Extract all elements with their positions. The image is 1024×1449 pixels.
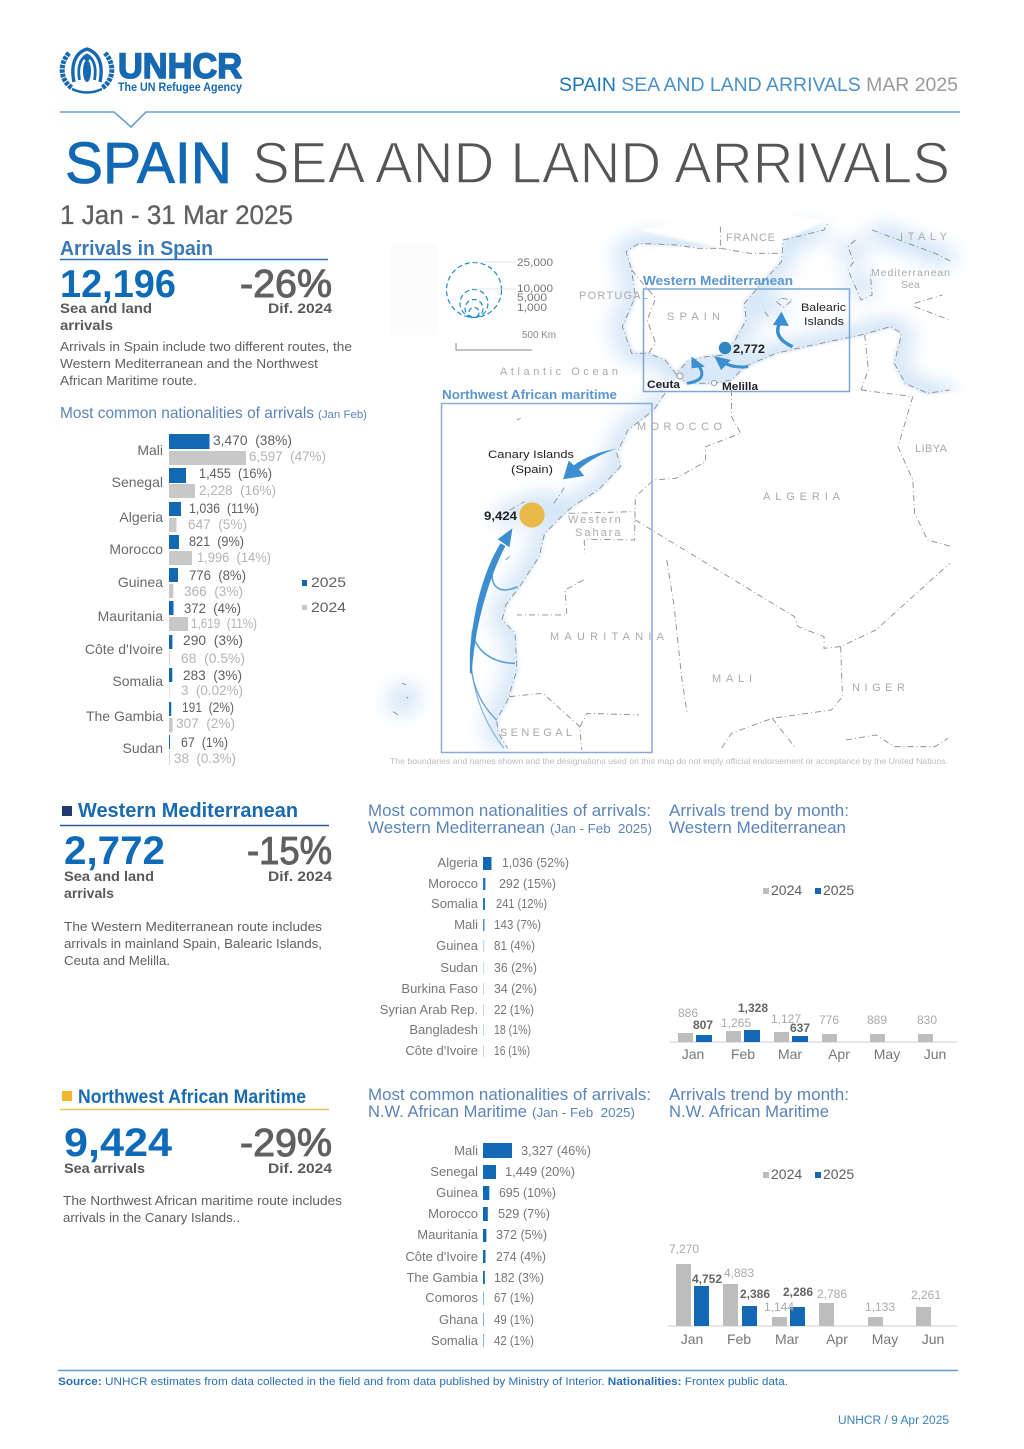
bar chart: nationalities of arrivals: The Gambia <box>86 708 163 724</box>
bar chart: Western Mediterranean nationalities: Algeria <box>438 855 479 870</box>
panel: arrivals in Spain: Dif. 2024 <box>268 300 332 316</box>
description <box>60 339 352 388</box>
column chart: Northwest African by month: 4,752 <box>692 1272 722 1286</box>
map labels: countries and seas: FRANCE <box>726 232 778 244</box>
scale bar: 500 Km <box>522 330 556 341</box>
bar chart: nationalities of arrivals: Mauritania <box>98 608 163 624</box>
map labels: countries and seas: NIGER <box>852 682 908 694</box>
column chart: Northwest African by month: 1,144 <box>764 1300 794 1314</box>
bar chart: nationalities of arrivals: 1,036 (11%) <box>189 500 259 516</box>
column chart: Western Mediterranean by month: 776 <box>819 1013 839 1027</box>
column chart: Northwest African by month: 2,786 <box>817 1287 847 1301</box>
proportional symbol: Western Mediterranean: 2,772 <box>733 344 765 356</box>
bar chart: Western Mediterranean nationalities: 16 (1%) <box>494 1043 530 1058</box>
bar chart: Western Mediterranean nationalities: 292 (15%) <box>499 876 556 891</box>
icon: UNHCR emblem <box>62 49 112 92</box>
map labels: places: Balearic <box>801 302 847 314</box>
bar chart: Western Mediterranean nationalities: 81 (4%) <box>494 938 535 953</box>
bar chart: nationalities of arrivals: Algeria <box>119 509 163 525</box>
column chart: Northwest African by month: Jan <box>681 1331 703 1347</box>
description <box>64 919 323 968</box>
heading: Western Mediterranean trend: Arrivals trend by month: <box>669 802 849 820</box>
bar chart: Western Mediterranean nationalities: Morocco <box>428 876 478 891</box>
heading: Western Mediterranean nationalities: (Jan - Feb 2025) <box>550 822 652 836</box>
map labels: places: (Spain) <box>511 464 553 476</box>
column chart: Northwest African by month: 2,286 <box>783 1285 813 1299</box>
map glow and land <box>395 210 965 753</box>
heading: Northwest African nationalities: N.W. African Maritime <box>368 1103 527 1121</box>
bar chart: Western Mediterranean nationalities: 22 (1%) <box>494 1002 534 1017</box>
chart legend: 2024 <box>311 599 346 615</box>
African land <box>498 328 965 753</box>
bar chart: Northwest African nationalities: Comoros <box>425 1290 478 1305</box>
bar chart: Northwest African nationalities: 182 (3%) <box>494 1270 544 1285</box>
bar chart: Northwest African nationalities: 49 (1%) <box>494 1312 534 1327</box>
bar chart: Northwest African nationalities: 529 (7%) <box>498 1206 550 1221</box>
bar chart: Northwest African nationalities: 67 (1%) <box>494 1290 534 1305</box>
chart legend <box>302 574 346 615</box>
route box: Northwest African maritime: Northwest African maritime <box>442 388 617 402</box>
heading: Northwest African trend: Arrivals trend by month: <box>669 1086 849 1104</box>
country borders and coastlines <box>393 223 952 750</box>
bar chart: nationalities of arrivals: 372 (4%) <box>184 600 241 616</box>
route box: Western Mediterranean <box>643 274 850 392</box>
legend: 2025 <box>823 1166 854 1182</box>
heading: Northwest African nationalities: (Jan - Feb 2025) <box>532 1106 635 1120</box>
map labels: places: Melilla <box>722 381 759 393</box>
description: The Northwest African maritime route includes <box>63 1193 343 1208</box>
map labels: countries and seas: ALGERIA <box>763 491 843 503</box>
heading: Northwest African nationalities: Most common nationalities of arrivals: <box>368 1086 651 1104</box>
column chart: Western Mediterranean by month: Mar <box>778 1046 802 1062</box>
map labels: countries and seas: MOROCCO <box>637 421 725 433</box>
bar chart: nationalities of arrivals: Côte d'Ivoire <box>85 641 163 657</box>
bar chart: Western Mediterranean nationalities: 241 (12%) <box>496 896 547 911</box>
source note: Source: UNHCR estimates from data collected in the field and from data published by Ministry of Interior. Nationalities: Frontex public data. <box>58 1376 788 1388</box>
bar chart: nationalities of arrivals: 821 (9%) <box>189 533 244 549</box>
bar chart: Northwest African nationalities: Mali <box>454 1143 478 1158</box>
bar chart: nationalities of arrivals: Morocco <box>109 541 163 557</box>
column chart: Northwest African by month: 2,261 <box>911 1288 941 1302</box>
logo tagline: The UN Refugee Agency <box>118 82 243 94</box>
title: SPAIN <box>65 131 232 196</box>
heading: nationalities chart: Most common nationalities of arrivals <box>60 405 314 422</box>
arrows: Northwest African maritime routes <box>470 528 518 748</box>
map labels: places: Canary Islands <box>488 449 575 461</box>
map <box>390 210 965 753</box>
column chart: Northwest African by month: 1,133 <box>865 1300 895 1314</box>
panel: Northwest African Maritime <box>60 1087 343 1225</box>
column chart: Northwest African by month: 4,883 <box>724 1266 754 1280</box>
map disclaimer: The boundaries and names shown and the designations used on this map do not imply official endorsement or acceptance by the United Nations. <box>390 756 948 766</box>
bar chart: Northwest African nationalities: Somalia <box>431 1333 479 1348</box>
column chart: Northwest African by month: 2,386 <box>740 1287 770 1301</box>
column chart: Western Mediterranean by month: 807 <box>693 1018 713 1032</box>
bar chart: Western Mediterranean nationalities <box>380 855 569 1058</box>
bar chart: Northwest African nationalities: Côte d'Ivoire <box>405 1249 478 1264</box>
bar chart: Northwest African nationalities: The Gambia <box>406 1270 479 1285</box>
heading: Northwest African nationalities <box>368 1086 651 1121</box>
bar chart: nationalities of arrivals: 3 (0.02%) <box>181 682 243 698</box>
marker square <box>62 806 72 816</box>
description <box>63 1193 343 1225</box>
heading: Western Mediterranean nationalities: Western Mediterranean <box>368 819 545 837</box>
column chart: Northwest African by month: Jun <box>922 1331 944 1347</box>
map labels: countries and seas <box>500 231 950 739</box>
bar chart: Northwest African nationalities: Senegal <box>430 1164 478 1179</box>
panel: Western Mediterranean <box>60 800 332 968</box>
legend: proportional circles: 25,000 <box>517 257 553 269</box>
heading: Northwest African trend: N.W. African Maritime <box>669 1103 829 1121</box>
chart legend: 2025 <box>311 574 346 590</box>
bars 2024 <box>169 451 246 765</box>
map labels: countries and seas: LIBYA <box>915 443 950 455</box>
date range: 1 Jan - 31 Mar 2025 <box>60 200 293 230</box>
map labels: countries and seas: MAURITANIA <box>550 631 667 643</box>
bar chart: nationalities of arrivals: 68 (0.5%) <box>181 650 245 666</box>
map labels: countries and seas: Western <box>568 514 623 526</box>
bar chart: Western Mediterranean nationalities: Syrian Arab Rep. <box>380 1002 478 1017</box>
bar chart: Western Mediterranean nationalities: Sudan <box>440 960 478 975</box>
column chart: Western Mediterranean by month: 1,127 <box>771 1012 801 1026</box>
column chart: Western Mediterranean by month: Jun <box>924 1046 946 1062</box>
bar chart: Northwest African nationalities: Morocco <box>428 1206 478 1221</box>
column chart: Western Mediterranean by month: 886 <box>678 1006 698 1020</box>
total arrivals: 2,772 <box>64 829 165 873</box>
change vs 2024: -15% <box>247 830 332 873</box>
column chart: Western Mediterranean by month: 830 <box>917 1013 937 1027</box>
bars 2025 <box>169 434 210 749</box>
column chart: Western Mediterranean by month <box>670 882 957 1062</box>
heading: Western Mediterranean <box>78 800 298 822</box>
column chart: Western Mediterranean by month: Apr <box>828 1046 850 1062</box>
header rule with notch <box>60 112 960 127</box>
map labels: countries and seas: Sahara <box>575 527 622 539</box>
legend: proportional circles: 5,000 <box>517 292 547 304</box>
marker square <box>62 1091 72 1101</box>
bar chart: nationalities of arrivals: Guinea <box>118 574 163 590</box>
country names: Mali <box>137 442 163 458</box>
legend <box>763 882 854 898</box>
bar chart: Northwest African nationalities: Ghana <box>439 1312 479 1327</box>
map labels: countries and seas: Atlantic Ocean <box>500 366 620 378</box>
bar chart: nationalities of arrivals: 191 (2%) <box>182 699 234 715</box>
scale bar <box>456 330 556 350</box>
bar chart: nationalities of arrivals: 307 (2%) <box>176 715 235 731</box>
description: Western Mediterranean and the Northwest <box>60 356 318 371</box>
column chart: Western Mediterranean by month: 889 <box>867 1013 887 1027</box>
total arrivals: 9,424 <box>64 1121 173 1165</box>
map labels: places: Islands <box>804 316 845 328</box>
bar chart: nationalities of arrivals: Sudan <box>123 740 163 756</box>
description: The Western Mediterranean route includes <box>64 919 323 934</box>
description: Ceuta and Melilla. <box>64 953 170 968</box>
bar chart: Western Mediterranean nationalities: 143 (7%) <box>494 917 541 932</box>
panel: Western Mediterranean: arrivals <box>64 885 114 901</box>
values 2024: 6,597 (47%) <box>249 448 326 464</box>
proportional symbol: Western Mediterranean <box>719 342 765 356</box>
column chart: Northwest African by month: Feb <box>727 1331 751 1347</box>
proportional symbol: Northwest African maritime <box>484 502 545 528</box>
bar chart: Western Mediterranean nationalities: 1,036 (52%) <box>502 855 569 870</box>
bar chart: nationalities of arrivals: 283 (3%) <box>183 667 242 683</box>
bar chart: nationalities of arrivals: 1,455 (16%) <box>199 465 272 481</box>
bar chart: Northwest African nationalities: 1,449 (20%) <box>505 1164 575 1179</box>
legend: proportional circles <box>446 257 553 318</box>
column chart: Western Mediterranean by month: Feb <box>731 1046 755 1062</box>
panel: arrivals in Spain: arrivals <box>60 317 113 333</box>
heading: Northwest African trend <box>669 1086 849 1121</box>
change vs 2024: -26% <box>240 263 332 306</box>
column chart: Northwest African by month: Mar <box>775 1331 799 1347</box>
logo wordmark: UNHCR <box>118 47 242 86</box>
column chart: Western Mediterranean by month: 637 <box>790 1021 810 1035</box>
change vs 2024: -29% <box>240 1122 332 1165</box>
bar chart: Northwest African nationalities <box>405 1143 591 1348</box>
total arrivals: 12,196 <box>60 263 176 306</box>
legend: 2025 <box>823 882 854 898</box>
heading: Northwest African Maritime <box>78 1087 306 1108</box>
route box: Northwest African maritime <box>442 388 652 752</box>
proportional symbol: Northwest African maritime: 9,424 <box>484 509 517 523</box>
title: SEA AND LAND ARRIVALS <box>252 131 950 196</box>
bar chart: nationalities of arrivals: 647 (5%) <box>188 516 247 532</box>
bar chart: nationalities of arrivals: 38 (0.3%) <box>174 750 236 766</box>
map labels: places <box>488 302 847 476</box>
panel: Western Mediterranean: Sea and land <box>64 868 154 884</box>
panel: arrivals in Spain: Sea and land <box>60 300 152 316</box>
bar chart: nationalities of arrivals: 1,996 (14%) <box>197 549 271 565</box>
description: arrivals in the Canary Islands.. <box>63 1210 240 1225</box>
heading: Arrivals in Spain <box>60 238 213 260</box>
heading: Western Mediterranean trend: Western Mediterranean <box>669 819 846 837</box>
bar chart: nationalities of arrivals: 290 (3%) <box>183 632 243 648</box>
panel: Northwest African Maritime: Dif. 2024 <box>268 1160 332 1176</box>
bar chart: Western Mediterranean nationalities: Guinea <box>436 938 479 953</box>
map labels: countries and seas: ITALY <box>900 231 950 243</box>
arrows: Western Mediterranean <box>687 312 793 383</box>
route box: Western Mediterranean: Western Mediterranean <box>643 274 793 288</box>
bar chart: Northwest African nationalities: 372 (5%) <box>496 1227 547 1242</box>
description: African Maritime route. <box>60 373 197 388</box>
running header: SPAIN SEA AND LAND ARRIVALS MAR 2025 <box>559 74 958 96</box>
bar chart: Western Mediterranean nationalities: 36 (2%) <box>494 960 537 975</box>
panel: arrivals in Spain <box>60 238 352 388</box>
legend: 2024 <box>771 1166 802 1182</box>
legend: 2024 <box>771 882 802 898</box>
bar chart: Northwest African nationalities: 3,327 (46%) <box>521 1143 591 1158</box>
Iberia land <box>625 210 828 372</box>
bar chart: Northwest African nationalities: 274 (4%) <box>496 1249 546 1264</box>
bar chart: Northwest African nationalities: 695 (10%) <box>499 1185 556 1200</box>
bar chart: Northwest African nationalities: Mauritania <box>417 1227 479 1242</box>
heading: nationalities chart: (Jan Feb) <box>318 409 367 421</box>
arrow: Canary Islands route <box>563 449 617 479</box>
legend: proportional circles: 1,000 <box>517 302 547 314</box>
date stamp: UNHCR / 9 Apr 2025 <box>838 1415 949 1427</box>
heading: Western Mediterranean trend <box>669 802 849 837</box>
column chart: Western Mediterranean by month: Jan <box>682 1046 704 1062</box>
bar chart: nationalities of arrivals: 67 (1%) <box>181 734 228 750</box>
bar chart: Western Mediterranean nationalities: Somalia <box>431 896 479 911</box>
column chart: Western Mediterranean by month: 1,265 <box>721 1016 751 1030</box>
column chart: Northwest African by month: May <box>872 1331 898 1347</box>
bar chart: Western Mediterranean nationalities: 34 (2%) <box>494 981 537 996</box>
bar chart: Western Mediterranean nationalities: 18 (1%) <box>494 1022 531 1037</box>
bar chart: Western Mediterranean nationalities: Bangladesh <box>409 1022 478 1037</box>
column chart: Northwest African by month <box>668 1166 957 1347</box>
description: arrivals in mainland Spain, Balearic Islands, <box>64 936 322 951</box>
heading: Western Mediterranean nationalities: Most common nationalities of arrivals: <box>368 802 651 820</box>
panel: Western Mediterranean: Dif. 2024 <box>268 868 332 884</box>
column chart: Northwest African by month: Apr <box>826 1331 848 1347</box>
panel: Northwest African Maritime: Sea arrivals <box>64 1160 145 1176</box>
legend: proportional circles: 10,000 <box>517 283 553 295</box>
bar chart: Northwest African nationalities: 42 (1%) <box>494 1333 534 1348</box>
bar chart: nationalities of arrivals: 1,619 (11%) <box>191 615 257 631</box>
legend backdrop <box>390 244 437 335</box>
heading: Western Mediterranean nationalities <box>368 802 652 837</box>
footer rule <box>58 1370 958 1372</box>
column chart: Northwest African by month: 7,270 <box>669 1242 699 1256</box>
bar chart: nationalities of arrivals: 2,228 (16%) <box>199 482 276 498</box>
bar chart: Western Mediterranean nationalities: Mali <box>454 917 478 932</box>
column chart: Western Mediterranean by month: 1,328 <box>738 1001 768 1015</box>
column chart: Western Mediterranean by month: May <box>874 1046 900 1062</box>
values 2025: 3,470 (38%) <box>213 432 292 448</box>
bar chart: nationalities of arrivals: Senegal <box>112 474 163 490</box>
bar chart: Northwest African nationalities: Guinea <box>436 1185 479 1200</box>
map labels: countries and seas: PORTUGAL <box>579 290 651 302</box>
map labels: countries and seas: SENEGAL <box>500 727 575 739</box>
bar chart: nationalities of arrivals <box>85 432 326 766</box>
bar chart: Western Mediterranean nationalities: Burkina Faso <box>401 981 478 996</box>
legend <box>763 1166 854 1182</box>
map labels: countries and seas: Sea <box>901 279 920 291</box>
bar chart: nationalities of arrivals: 776 (8%) <box>189 567 246 583</box>
map labels: places: Ceuta <box>647 379 681 391</box>
bar chart: Western Mediterranean nationalities: Côte d'Ivoire <box>405 1043 478 1058</box>
UNHCR logo <box>62 47 243 94</box>
description: Arrivals in Spain include two different routes, the <box>60 339 352 354</box>
map labels: countries and seas: Mediterranean <box>871 267 950 279</box>
bar chart: nationalities of arrivals: Somalia <box>112 673 163 689</box>
map labels: countries and seas: MALI <box>712 673 755 685</box>
bar chart: nationalities of arrivals: 366 (3%) <box>184 583 243 599</box>
map labels: countries and seas: SPAIN <box>667 311 723 323</box>
